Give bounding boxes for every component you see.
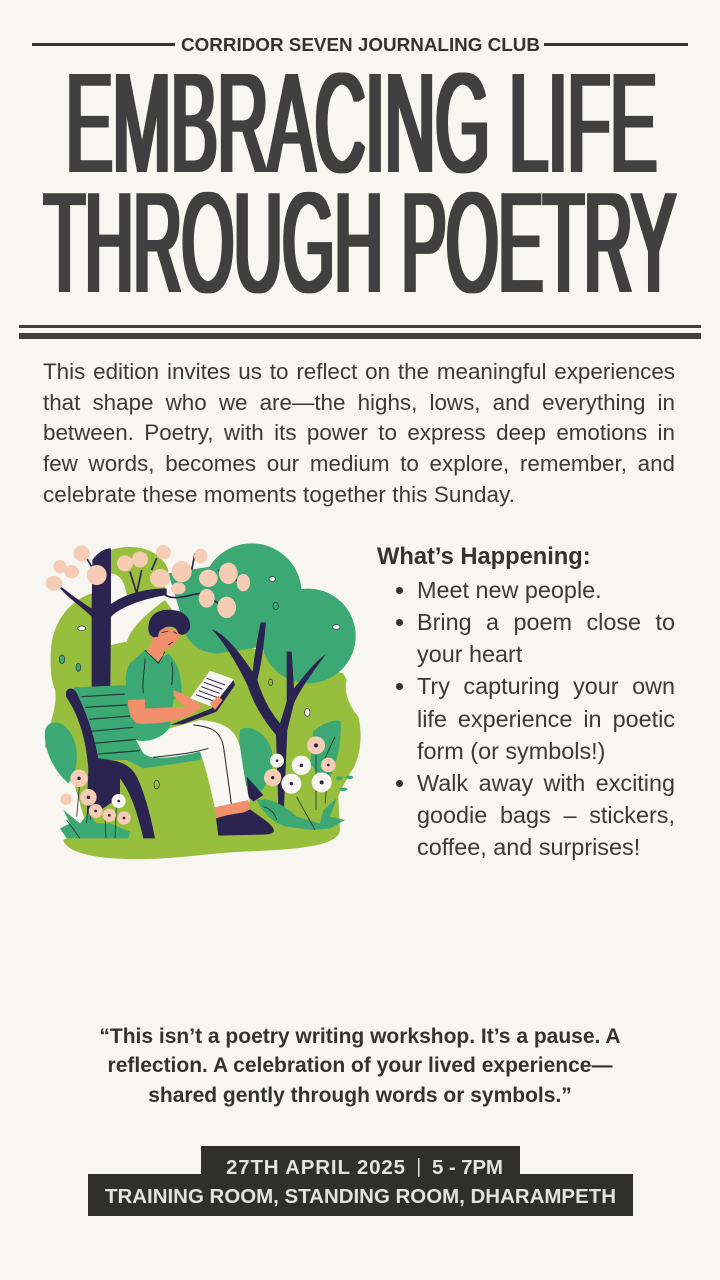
quote: shared gently through words or symbols.”	[148, 1084, 572, 1107]
list heading: What’s Happening:	[377, 544, 591, 570]
list items	[396, 577, 675, 860]
head	[147, 627, 180, 662]
book	[170, 680, 235, 725]
right tree	[212, 622, 326, 807]
quote: “This isn’t a poetry writing workshop. It’s a pause. A	[99, 1025, 621, 1048]
title	[43, 65, 677, 305]
list items: goodie bags – stickers,	[417, 802, 675, 828]
quote	[99, 1025, 621, 1107]
left tree	[59, 548, 167, 687]
falling leaves	[59, 577, 340, 789]
intro paragraph	[43, 359, 675, 507]
intro paragraph: that shape who we are—the highs, lows, and everything in	[43, 390, 675, 415]
date and venue banner: 5 - 7PM	[432, 1156, 503, 1179]
intro paragraph: few words, becomes our medium to explore, remember, and	[43, 451, 675, 476]
blossoms on branches	[46, 545, 250, 618]
shirt	[126, 650, 182, 741]
list items: Meet new people.	[417, 577, 602, 603]
arm	[128, 699, 197, 724]
list items: Walk away with exciting	[417, 770, 675, 796]
quote: reflection. A celebration of your lived experience—	[108, 1054, 612, 1077]
date and venue banner: 27TH APRIL 2025	[226, 1156, 405, 1179]
background foliage	[45, 543, 361, 859]
intro paragraph: between. Poetry, with its power to express deep emotions in	[43, 420, 675, 445]
header: club name with rules	[32, 34, 688, 55]
intro paragraph: This edition invites us to reflect on the meaningful experiences	[43, 359, 675, 384]
list items: form (or symbols!)	[417, 738, 605, 764]
bench	[66, 685, 263, 838]
header: club name with rules: CORRIDOR SEVEN JOURNALING CLUB	[181, 34, 540, 55]
list items: coffee, and surprises!	[417, 834, 640, 860]
double divider	[19, 325, 701, 339]
date and venue banner	[88, 1146, 633, 1216]
shoes	[216, 809, 274, 836]
illustration: man reading on a park bench	[44, 543, 361, 860]
date and venue banner: TRAINING ROOM, STANDING ROOM, DHARAMPETH	[105, 1185, 616, 1208]
trousers	[136, 720, 250, 808]
intro paragraph: celebrate these moments together this Sunday.	[43, 482, 515, 507]
list items: life experience in poetic	[417, 706, 675, 732]
list items: Bring a poem close to	[417, 609, 675, 635]
man reading	[126, 610, 274, 836]
list items: your heart	[417, 641, 522, 667]
flowers right	[257, 736, 353, 830]
list items: Try capturing your own	[417, 673, 675, 699]
flowers left	[60, 770, 131, 838]
